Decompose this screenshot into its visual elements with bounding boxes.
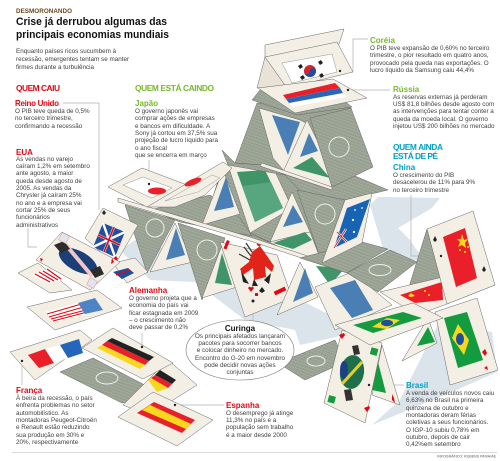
house of cards: Korea and Russia xyxy=(252,29,367,115)
text: Alemanha: – o crescimento não xyxy=(129,317,186,324)
text: Japão: que se encerra em março xyxy=(135,152,207,159)
card: France xyxy=(10,330,92,380)
card: small UK remains xyxy=(113,258,148,283)
card: green frame xyxy=(202,245,240,298)
section: quem ainda está de pé: ESTÁ DE PÉ xyxy=(393,150,438,161)
text: Rússia: queda da moeda local. O governo xyxy=(393,116,488,123)
text: Rússia: injetou US$ 200 bilhões no mercado xyxy=(393,123,495,130)
text: China: desacelerou de 11% para 9% xyxy=(393,179,476,186)
text: EUA: 2005. As vendas da xyxy=(16,185,72,192)
text: Espanha: Espanha xyxy=(226,401,260,410)
intro text xyxy=(16,48,129,71)
section: quem está caindo: QUEM ESTÁ CAINDO xyxy=(135,82,214,93)
text: França xyxy=(16,386,97,446)
text: EUA: administrativos xyxy=(16,222,58,229)
card: blue frame left xyxy=(150,223,193,272)
card: Australia xyxy=(322,193,372,263)
card: China back leaf xyxy=(408,229,443,290)
heading xyxy=(16,8,169,41)
section: quem ainda está de pé: QUEM AINDA xyxy=(393,142,443,152)
text: EUA: cortar 25% de seus xyxy=(16,207,70,214)
card: small Brazil leaf xyxy=(402,318,437,361)
card: Germany xyxy=(82,328,173,379)
card: Australia back xyxy=(297,190,345,263)
title xyxy=(16,16,169,41)
title: principais economias mundiais xyxy=(16,29,169,41)
text: EUA: no ano e a empresa vai xyxy=(16,200,82,207)
intro text: Enquanto países ricos sucumbem à xyxy=(16,48,117,55)
text: EUA: funcionários xyxy=(16,214,50,221)
text: EUA xyxy=(16,148,90,229)
text: Rússia: US$ 81,8 bilhões desde agosto com xyxy=(393,101,494,108)
card: king leaf xyxy=(372,345,400,405)
callout: Curinga: Curinga xyxy=(225,324,256,333)
text: Brasil: coletivas a seus funcionários. xyxy=(406,419,489,426)
leader lines xyxy=(22,39,441,405)
card: USA xyxy=(27,290,122,330)
callout: Curinga: pacotes para socorrer bancos xyxy=(198,340,282,347)
callout: Curinga xyxy=(186,320,294,380)
small green piece xyxy=(316,266,345,285)
card: blue frame xyxy=(202,170,240,225)
card: dollar floor left xyxy=(222,150,285,175)
house of cards: third storey xyxy=(222,103,388,200)
text: França: França xyxy=(16,386,43,395)
text: Reino Unido: confirmando a recessão xyxy=(15,123,83,130)
text: Brasil: 6,63% no Brasil na primeira xyxy=(406,397,484,404)
card: dollar back left xyxy=(125,205,175,273)
text: França: enfrenta problemas no setor xyxy=(16,402,95,409)
text: EUA: EUA xyxy=(16,148,33,157)
text: França: montadoras Peugeot-Citroën xyxy=(16,417,97,424)
text: EUA: ante agosto, a maior xyxy=(16,170,73,177)
text: Brasil: A venda de veículos novos caiu xyxy=(406,390,495,397)
text: China: O crescimento do PIB xyxy=(393,172,454,179)
text: Japão: e bancos em dificuldade. A xyxy=(135,123,211,130)
text: Espanha: é a maior desde 2000 xyxy=(226,432,287,439)
text: Brasil xyxy=(406,381,495,448)
dollar backing of the third storey xyxy=(235,103,351,187)
text: Japão: comprar ações de empresas xyxy=(135,115,215,122)
text: Espanha: 11,3% no país e a xyxy=(226,417,277,424)
house of cards: bottom storey xyxy=(125,205,392,330)
callout: Curinga: pode decidir novas ações xyxy=(204,362,276,369)
card: blue frame right xyxy=(283,120,332,187)
text: Brasil: 0,42%em setembro xyxy=(406,441,461,448)
text: Japão: o ano fiscal xyxy=(135,145,167,152)
text: França: automobilístico. As xyxy=(16,410,68,417)
card: blue frame left xyxy=(259,108,308,172)
title: Crise já derrubou algumas das xyxy=(16,16,167,28)
callout: Curinga: conjuntas xyxy=(227,369,253,376)
text: Coréia: provocado pela queda nas exportações. O xyxy=(370,60,489,67)
card: Russia xyxy=(258,79,367,113)
text: Reino Unido: Reino Unido xyxy=(15,99,59,108)
text: Brasil: O IGP-10 subiu 0,78% em xyxy=(406,427,480,434)
text: EUA: As vendas no varejo xyxy=(16,156,74,163)
text: Japão: Japão xyxy=(135,99,158,108)
text: Alemanha: deve passar de 0,2% xyxy=(129,324,189,331)
text: Alemanha: ficar estagnada em 2009 xyxy=(129,310,199,317)
text: Alemanha: Alemanha xyxy=(129,286,168,295)
text: Alemanha: economia do país vai xyxy=(129,302,189,309)
house of cards: right wing xyxy=(278,190,498,423)
card: green face xyxy=(228,165,292,233)
card: small USA xyxy=(18,263,72,293)
card: dollar back right xyxy=(310,108,373,187)
credit: INFOGRÁFICO: RUBENS PAIVA/AE xyxy=(437,454,497,458)
text: China: China xyxy=(393,163,416,172)
card: UK xyxy=(85,208,138,265)
text: Coréia: lucro líquido da Samsung caiu 44,4% xyxy=(370,67,474,74)
intro text: firmes durante a turbulência xyxy=(16,64,95,71)
card: dollar back centre xyxy=(178,223,225,300)
card: jack of USA xyxy=(36,232,120,290)
card: Brazil floor xyxy=(335,303,443,345)
text: Coréia: O PIB teve expansão de 0,60% no terceiro xyxy=(370,45,490,52)
card: blue wide xyxy=(315,272,392,330)
text: Japão: O governo japonês vai xyxy=(135,108,198,115)
text: Japão: projeção de lucro líquido para xyxy=(135,137,218,144)
card: green strip xyxy=(273,232,312,249)
card: blue frame right xyxy=(277,262,318,315)
text: Rússia xyxy=(393,85,495,130)
kicker: DESMORONANDO xyxy=(16,8,72,15)
text: EUA: queda desde agosto de xyxy=(16,178,82,185)
plank cream xyxy=(250,232,322,263)
text: Japão: Sony já cortou em 37,5% sua xyxy=(135,130,218,137)
card: Japan flat xyxy=(108,168,187,207)
text: China xyxy=(393,163,476,194)
plank xyxy=(260,163,332,190)
text: Espanha xyxy=(226,401,294,439)
section: quem caiu: QUEM CAIU xyxy=(16,83,60,93)
text: Reino Unido xyxy=(15,99,90,130)
strip: dollar floor xyxy=(150,195,252,236)
text: Rússia: Rússia xyxy=(393,85,420,94)
card: small Germany xyxy=(123,360,197,412)
card: joker xyxy=(220,240,292,317)
cards: dollar backs flat xyxy=(300,242,388,273)
text: Espanha: O desemprego já atinge xyxy=(226,410,294,417)
house of cards: second storey xyxy=(108,162,345,269)
shadows behind the house of cards xyxy=(120,197,497,425)
callout: Curinga: Encontro do G-20 em novembro xyxy=(195,355,285,362)
card: Korea xyxy=(265,42,353,88)
card: back under Germany xyxy=(60,358,160,403)
card: large Brazil xyxy=(435,298,498,385)
dollar back left of king xyxy=(278,340,345,380)
text: Coréia: trimestre, o pior resultado em quatro anos, xyxy=(370,52,489,59)
text: Reino Unido: no terceiro trimestre, xyxy=(15,115,73,122)
card: blue frame right xyxy=(270,192,310,242)
text: Alemanha xyxy=(129,286,199,331)
text: Japão xyxy=(135,99,218,159)
text: Coréia: Coréia xyxy=(370,36,395,45)
text: Brasil: montadoras deram férias xyxy=(406,412,476,419)
text: França: sua produção em 30% e xyxy=(16,432,85,439)
dollar backing of the second storey xyxy=(205,168,345,263)
text: Brasil: Brasil xyxy=(406,381,428,390)
card: China floor xyxy=(380,277,495,315)
text: França: 20%, respectivamente xyxy=(16,439,79,446)
text: Coréia xyxy=(370,36,490,74)
card: dollar floor xyxy=(285,173,388,200)
card: Japan sloped xyxy=(147,162,232,207)
text: EUA: Chrysler já caíram 25% xyxy=(16,192,82,199)
callout: Curinga: e colocar dinheiro no mercado. xyxy=(197,347,283,354)
section: quem ainda está de pé xyxy=(393,142,443,161)
text: EUA: caíram 1,2% em setembro xyxy=(16,163,90,170)
card: China xyxy=(427,211,495,304)
text: China: no terceiro trimestre xyxy=(393,187,449,194)
card: floor with dollar back xyxy=(252,90,352,115)
left wing: fallen cards xyxy=(10,208,213,446)
text: Alemanha: O governo projeta que a xyxy=(129,295,197,302)
text: Espanha: população sem trabalho xyxy=(226,424,294,431)
text: Rússia: as intervenções para tentar conter a xyxy=(393,108,494,115)
text: França: À beira da recessão, o país xyxy=(16,393,93,402)
intro text: recessão, emergentes tentam se manter xyxy=(16,56,129,63)
text: Brasil: outubro, depois de cair xyxy=(406,434,470,441)
text: França: e Renault estão reduzindo xyxy=(16,424,90,431)
text: Brasil: quinzena de outubro e xyxy=(406,405,469,412)
text: Reino Unido: O PIB teve queda de 0,5% xyxy=(15,108,90,115)
card: back of top xyxy=(265,29,344,60)
plank xyxy=(118,198,335,269)
callout: Curinga: Os principais afetados lançaram xyxy=(195,333,285,340)
card: king of Brazil xyxy=(324,330,382,423)
text: Rússia: As reservas externas já perderam xyxy=(393,94,488,101)
card: Spain xyxy=(118,392,213,446)
